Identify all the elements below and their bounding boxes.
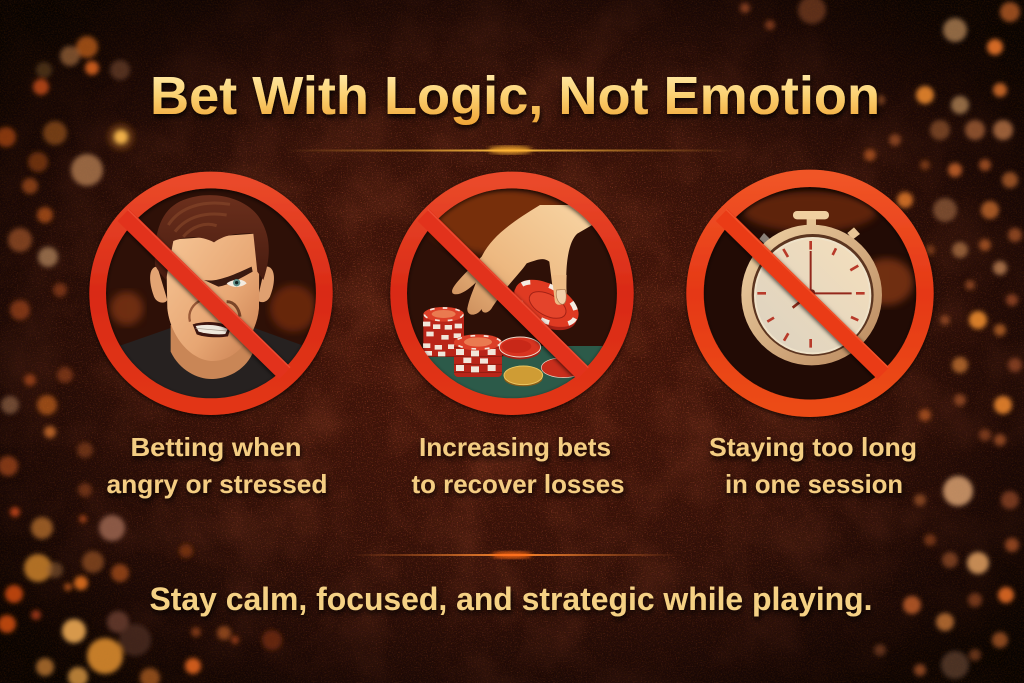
caption: increasing bets (412, 432, 624, 499)
caption: staying too long: in one session (725, 469, 903, 499)
panel: chips and hand (399, 180, 625, 407)
right chip stack (454, 334, 502, 377)
caption: angry or stressed (106, 432, 328, 499)
caption: staying too long: Staying too long (709, 432, 917, 462)
bokeh lights left (0, 36, 282, 683)
prohibition ring (695, 178, 925, 408)
bokeh lights right (740, 0, 1022, 679)
prohibition ring (399, 180, 625, 407)
panel: angry face (98, 180, 324, 407)
divider: bottom (350, 552, 680, 558)
prohibition ring (98, 180, 324, 407)
flat chip (499, 337, 541, 359)
divider: top (285, 146, 735, 154)
chip on table (541, 358, 575, 378)
icon: stopwatch (704, 187, 916, 399)
caption: increasing bets: Increasing bets (419, 432, 611, 462)
icon: angry man (105, 187, 317, 405)
gold coin (504, 366, 543, 386)
panel: stopwatch (695, 178, 925, 408)
left chip stack (423, 307, 464, 357)
icon: hand placing chips (406, 187, 618, 405)
closing message: Stay calm, focused, and strategic while playing. (150, 581, 872, 617)
tilted chip (514, 280, 579, 330)
title: Bet With Logic, Not Emotion (150, 66, 880, 126)
caption: angry or stressed: angry or stressed (106, 469, 328, 499)
caption: staying too long (709, 432, 917, 499)
caption: increasing bets: to recover losses (412, 469, 624, 499)
caption: angry or stressed: Betting when (130, 432, 302, 462)
